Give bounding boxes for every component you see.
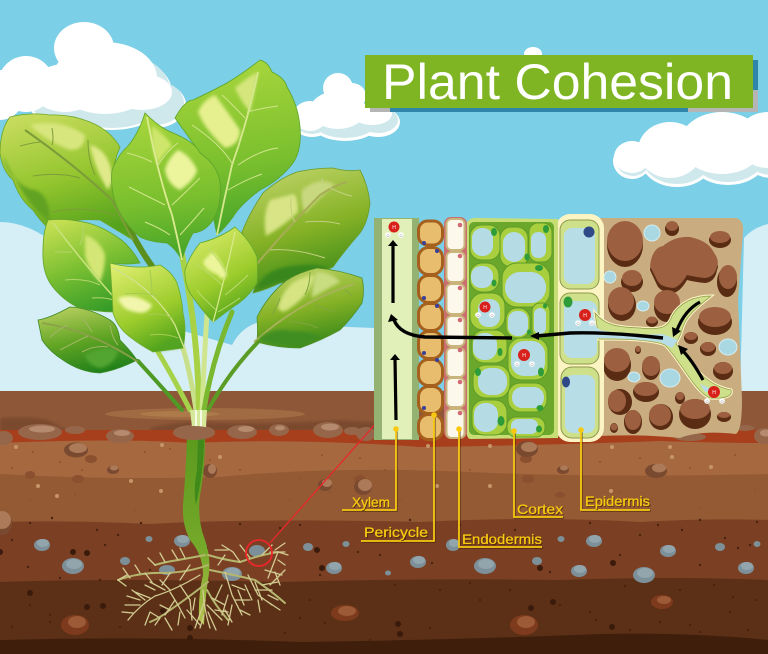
water molecule: xylem: H [392, 225, 396, 231]
leaf: bottom right [254, 268, 364, 348]
water molecule: cortex lower: H [522, 353, 526, 359]
water molecule: cortex upper: O [476, 313, 480, 318]
label: Xylem: Xylem [353, 495, 391, 511]
water molecule: epidermis: O [590, 321, 594, 326]
label: Endodermis: Endodermis [462, 531, 542, 547]
leaf: top right [175, 60, 300, 235]
label: Pericycle: Pericycle [365, 525, 429, 541]
cortex cells [470, 223, 552, 437]
label: Cortex [511, 428, 564, 518]
label: Epidermis [578, 427, 651, 511]
water molecule: cortex lower [514, 349, 535, 367]
ground layers [0, 391, 768, 654]
arrow: root hair upper [672, 302, 700, 337]
water molecule: epidermis [575, 309, 595, 326]
leaf: center small [185, 227, 258, 322]
panel: pericycle [418, 221, 442, 440]
water molecule: cortex upper [475, 302, 495, 318]
label: Pericycle [361, 412, 437, 542]
root hair channel [590, 296, 731, 398]
leaf: front left [110, 263, 187, 355]
cloud: middle [292, 73, 400, 141]
water molecule: cortex lower: O [530, 362, 534, 367]
cloud: right [613, 112, 768, 187]
surface rocks band [0, 422, 768, 445]
distant pale hills [0, 222, 768, 392]
water molecule: root hair: O [705, 399, 709, 404]
cloud: left [0, 22, 186, 130]
label: Xylem: Xylem [352, 494, 390, 510]
stem base and underground stem [173, 410, 215, 625]
water molecule: cortex lower: O [515, 362, 519, 367]
water molecule: cortex upper: O [490, 313, 494, 318]
leaf: left middle [43, 219, 140, 312]
panel: cortex [467, 218, 558, 439]
arrow: root hair lower [678, 345, 703, 380]
label: Endodermis [456, 426, 543, 548]
label: Epidermis: Epidermis [586, 494, 651, 510]
title banner: Plant Cohesion [382, 54, 733, 110]
water molecule: xylem [385, 222, 404, 238]
water molecule: epidermis: H [583, 313, 587, 319]
water molecule: cortex upper: H [483, 305, 487, 311]
soil blotches and specks [0, 445, 757, 640]
water droplets in soil [604, 225, 737, 387]
cloud behind title [524, 47, 542, 61]
label: Cortex: Cortex [517, 501, 563, 517]
arrow: xylem lower [390, 354, 400, 420]
panel: endodermis [444, 217, 467, 439]
water molecule: epidermis: O [576, 321, 580, 326]
roots [118, 543, 288, 630]
label: Epidermis: Epidermis [585, 493, 650, 509]
endodermis cells [446, 219, 464, 438]
arrow: xylem upper [388, 240, 398, 303]
label: Pericycle: Pericycle [364, 524, 428, 540]
panel: epidermis [556, 214, 604, 442]
water molecule: root hair: O [720, 399, 724, 404]
soil rocks [0, 441, 673, 635]
water molecule: root hair: H [712, 390, 716, 396]
label: Cortex: Cortex [518, 502, 564, 518]
label: Endodermis: Endodermis [463, 532, 543, 548]
water molecule: xylem: O [399, 233, 403, 238]
plant stems [122, 215, 262, 410]
epidermis cells [560, 220, 599, 438]
arrow: main water path [388, 314, 663, 340]
grey stones [34, 535, 760, 583]
label: Xylem [342, 426, 399, 511]
water molecule: root hair [704, 386, 725, 404]
leaf: left top [0, 114, 133, 240]
leaf: center large [112, 113, 220, 260]
sky background [0, 0, 768, 400]
callout: red magnifier line [246, 369, 424, 566]
panel: xylem [374, 218, 419, 440]
panel: soil cross section [600, 218, 743, 438]
soil particles [603, 221, 737, 434]
leaf: bottom left [38, 307, 138, 373]
leaf: right middle [242, 168, 370, 293]
water molecule: xylem: O [386, 233, 390, 238]
